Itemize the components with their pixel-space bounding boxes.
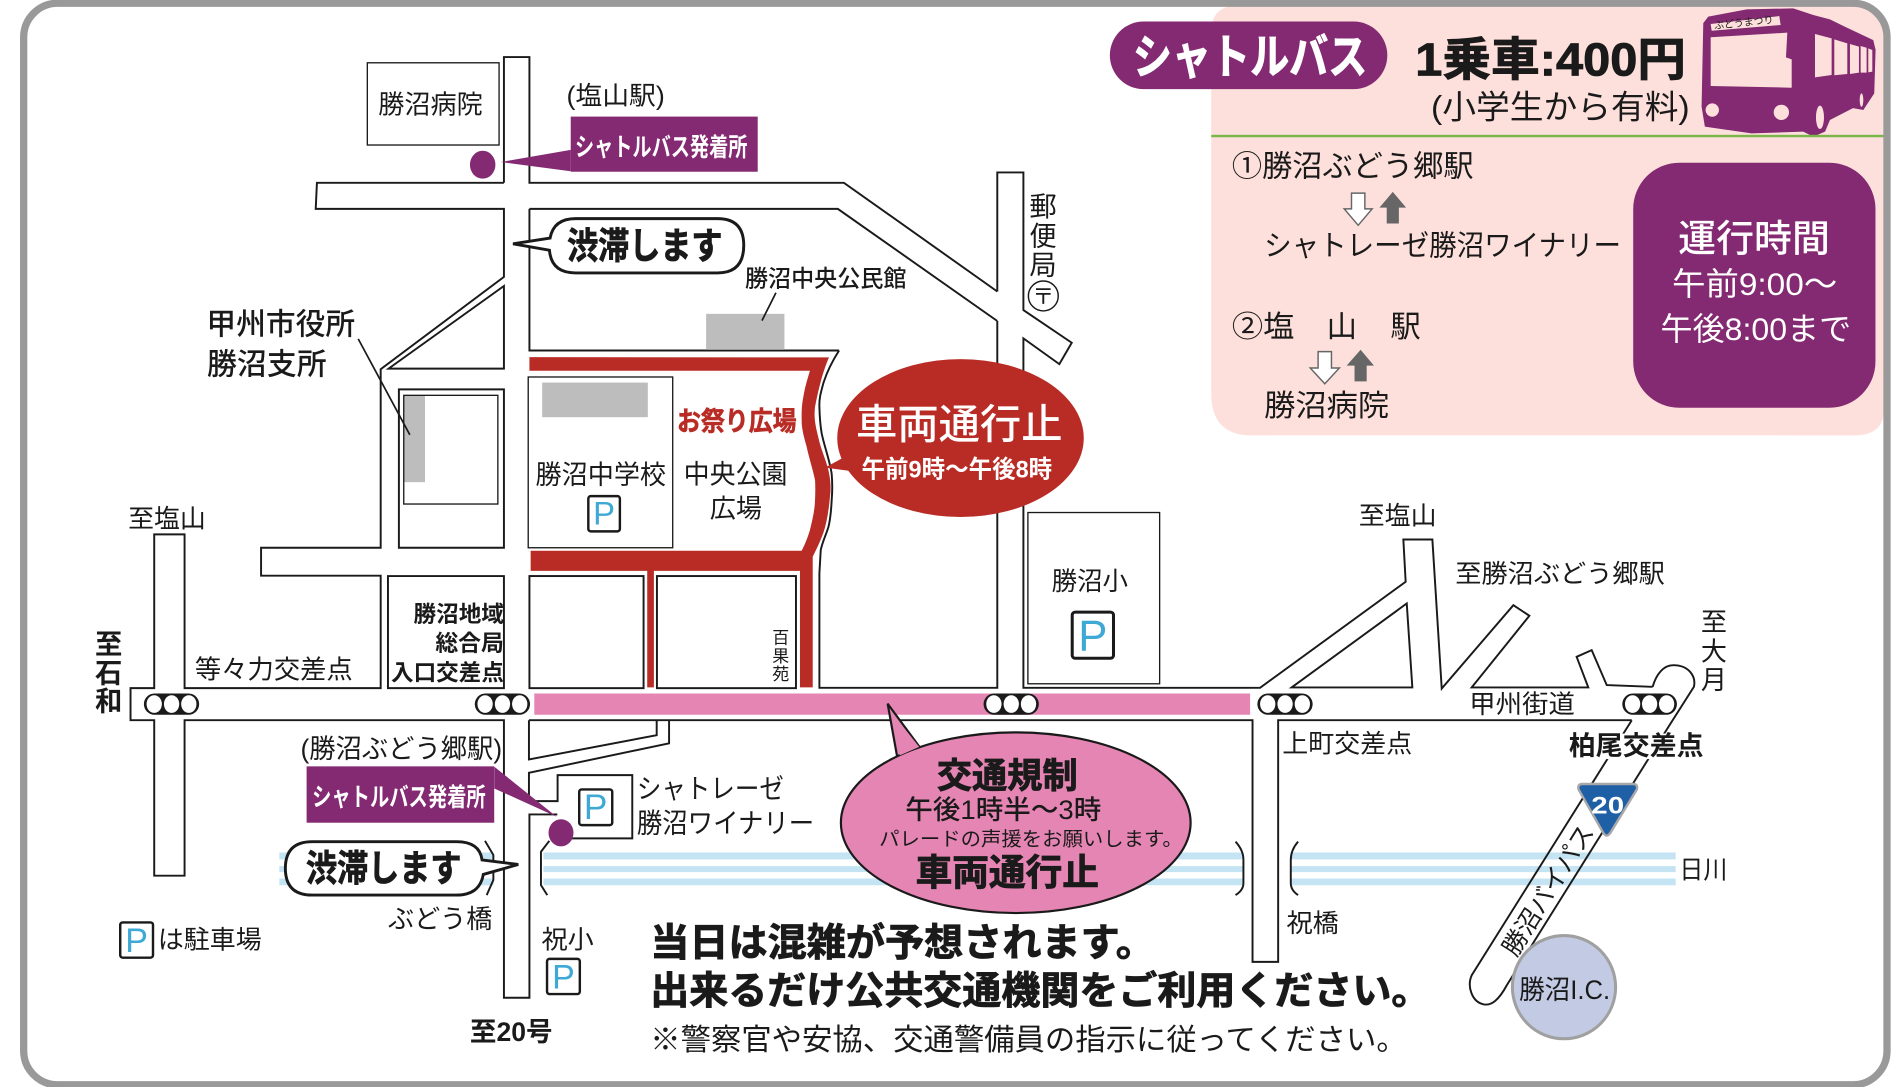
arrow: down hollow [1344,193,1372,225]
legend: parking: は駐車場 [158,927,262,955]
label: Todoroki intersection: 等々力交差点 [195,654,353,684]
label: regional office entrance intersection [391,602,504,686]
legend: parking [120,922,262,960]
route 2: 山 [1327,311,1357,344]
callout: traffic regulation pink: 交通規制 [937,757,1078,796]
label: post office vertical: 郵 [1029,191,1057,222]
label: Hyakkaen vertical: 果 [772,647,789,666]
parking icon: winery: P [584,788,607,827]
building: city office branch [358,339,498,504]
fare text: (小学生から有料) [1431,88,1690,125]
label: to Otsuki vertical: 月 [1701,665,1727,695]
label: post office vertical: 〒 [1032,284,1054,309]
label: to Otsuki vertical [1701,607,1727,695]
traffic signal: Todoroki [144,693,199,715]
heading pill: shuttle bus [1110,21,1387,89]
panel: shuttle bus info background [1211,6,1884,435]
label: to Enzan east: 至塩山 [1359,503,1436,531]
label: Koshu city office: 甲州市役所 [206,308,355,342]
traffic signal: Kashio [1622,693,1677,715]
river: Hikawa [279,848,1676,891]
callout: shuttle stop Enzan: シャトルバス発着所 [575,134,747,162]
label: Koshu city office: 勝沼支所 [207,348,327,382]
label: Katsunuma bypass: 勝沼バイパス [1497,820,1600,961]
road network [131,57,1694,1005]
notice: expected congestion: 出来るだけ公共交通機関をご利用ください。 [650,970,1430,1013]
label: Katsunuma Budokyo station: (勝沼ぶどう郷駅) [301,734,502,764]
icon: Katsunuma IC: 勝沼I.C. [1519,975,1610,1005]
callout: vehicle closure red [825,359,1084,517]
arrow: up solid 2 [1347,350,1374,381]
route 2 [1232,310,1421,423]
building: junior high school: 勝沼中学校 [536,460,666,490]
icon: bus: ぶどうまつり [1714,14,1774,32]
callout: vehicle closure red: 車両通行止 [856,401,1062,447]
label: Chateraise winery [637,773,814,839]
label: central park plaza: 広場 [710,493,762,523]
icon: Katsunuma IC [1512,936,1616,1039]
label: to Isawa vertical [95,628,122,716]
notice: expected congestion [650,922,1430,1057]
building: Katsunuma hospital [367,63,499,145]
legend: parking: P [125,922,148,960]
traffic signal: regional office [475,693,530,715]
panel: operating hours: 午前9:00～ [1672,266,1837,302]
label: regional office entrance intersection: 総合局 [435,631,504,656]
label: regional office entrance intersection: 勝沼地域 [413,602,504,627]
panel: operating hours: 運行時間 [1678,217,1830,259]
route 2: 勝沼病院 [1264,389,1389,423]
notice: expected congestion: 当日は混雑が予想されます。 [650,922,1155,965]
label: post office vertical: 便 [1029,220,1057,251]
label: Hyakkaen vertical: 苑 [772,665,789,684]
building: community center: 勝沼中央公民館 [745,266,906,292]
building: Iwai elementary [542,927,594,997]
label: central park plaza [684,459,787,523]
traffic signal: central [984,693,1039,715]
label: central park plaza: 中央公園 [684,459,787,489]
callout: traffic regulation pink: 車両通行止 [916,852,1099,893]
traffic signal: Kamimachi [1257,693,1313,715]
label: Chateraise winery: 勝沼ワイナリー [637,808,814,839]
callout: traffic regulation pink: パレードの声援をお願いします。 [879,828,1183,850]
festival plaza red route [529,357,831,687]
fare text [1415,33,1690,125]
callout: shuttle stop Enzan [470,117,758,179]
building: Katsunuma hospital: 勝沼病院 [378,90,483,120]
label: post office vertical [1028,191,1058,311]
label: Iwai bridge: 祝橋 [1287,910,1339,938]
building: junior high school [528,377,673,548]
callout: traffic jam north: 渋滞します [567,226,723,267]
building: elementary school [1028,513,1160,684]
label: to Route 20: 至20号 [470,1017,552,1047]
label: Hyakkaen vertical: 百 [772,629,789,648]
label: Koshu road: 甲州街道 [1469,691,1575,719]
callout: traffic regulation pink: 午後1時半～3時 [905,795,1101,825]
route 1 [1232,150,1621,263]
callout: vehicle closure red: 午前9時～午後8時 [862,456,1052,483]
label: Koshu city office [206,308,355,382]
label: Hyakkaen vertical [772,629,789,684]
route 2: ②塩 [1232,310,1294,344]
arrow: down hollow 2 [1310,352,1339,384]
label: Budo bridge: ぶどう橋 [388,904,492,934]
label: Chateraise winery: シャトレーゼ [637,773,784,804]
building: Iwai elementary: P [552,959,575,997]
arrow: up solid [1379,192,1406,223]
fare text: 1乗車:400円 [1415,33,1686,85]
label: post office vertical: 局 [1029,249,1057,280]
callout: traffic regulation pink [841,704,1191,913]
label: regional office entrance intersection: 入口交差点 [391,661,504,686]
building: community center [706,266,906,350]
route 1: シャトレーゼ勝沼ワイナリー [1264,230,1621,263]
label: to Otsuki vertical: 至 [1701,607,1727,637]
callout: shuttle stop Budokyo: シャトルバス発着所 [312,784,486,812]
pink closed road [534,693,1250,715]
icon: bus [1702,8,1876,137]
label: to Katsunuma Budokyo station: 至勝沼ぶどう郷駅 [1455,560,1665,588]
label: to Otsuki vertical: 大 [1701,637,1727,667]
heading pill: shuttle bus: シャトルバス [1133,31,1367,84]
icon: route 20 shield [1578,784,1637,836]
label: Kashio intersection: 柏尾交差点 [1569,731,1704,761]
callout: shuttle stop Budokyo [307,766,574,846]
icon: route 20 shield: 20 [1591,793,1624,820]
callout: traffic jam north [513,219,744,273]
route 2: 駅 [1390,311,1421,344]
label: festival plaza: お祭り広場 [677,407,797,437]
building: junior high school: P [593,495,615,532]
route 1: ①勝沼ぶどう郷駅 [1232,150,1474,184]
panel: operating hours [1633,163,1875,408]
label: to Isawa vertical: 和 [95,685,122,716]
notice: expected congestion: ※警察官や安協、交通警備員の指示に従ってください。 [650,1023,1407,1057]
label: to Isawa vertical: 至 [95,628,122,659]
building: elementary school: P [1078,611,1107,660]
label: to Enzan west: 至塩山 [128,506,206,534]
building: Iwai elementary: 祝小 [542,927,594,955]
panel: operating hours: 午後8:00まで [1661,311,1851,347]
label: to Isawa vertical: 石 [95,658,122,689]
label: Hi river: 日川 [1679,857,1727,885]
divider: green line [1211,135,1886,137]
label: Enzan station: (塩山駅) [566,82,665,110]
building: elementary school: 勝沼小 [1052,568,1128,596]
callout: traffic jam south [285,842,518,895]
label: Kamimachi intersection: 上町交差点 [1282,730,1412,758]
callout: traffic jam south: 渋滞します [306,848,461,889]
